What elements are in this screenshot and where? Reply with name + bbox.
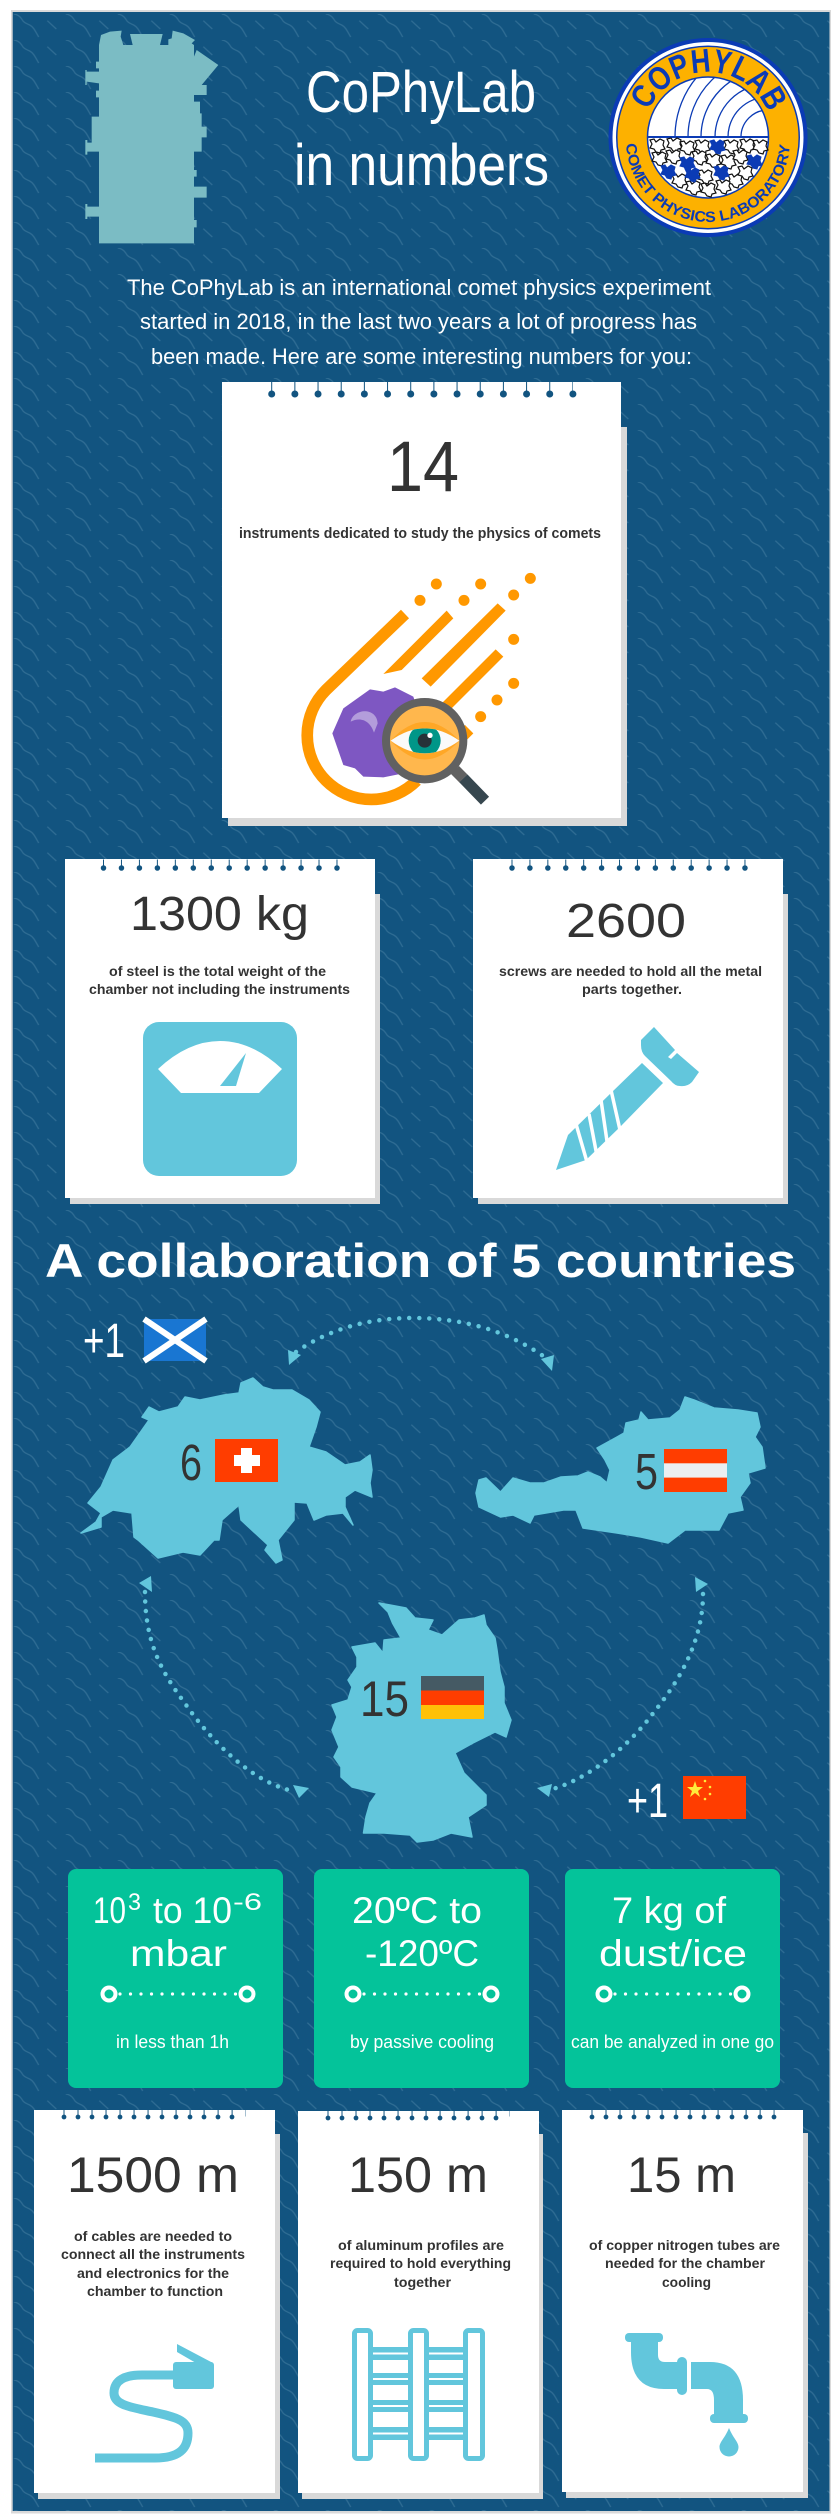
connector	[102, 1988, 254, 2000]
label: plus one China	[627, 1775, 746, 1828]
title: in numbers	[294, 133, 549, 198]
caption: steel: of steel is the total weight of the	[109, 963, 326, 979]
value: temperature range	[352, 1890, 482, 1974]
caption: copper: needed for the chamber	[605, 2255, 766, 2271]
icon: cable	[95, 2344, 214, 2458]
caption: aluminum: together	[394, 2274, 452, 2290]
caption: cooling: by passive cooling	[350, 2032, 494, 2052]
caption: screws: screws are needed to hold all the metal	[499, 963, 762, 979]
caption: aluminum: of aluminum profiles are	[338, 2237, 504, 2253]
label: plus one China: +1	[627, 1775, 668, 1828]
caption: cables: of cables are needed to	[74, 2228, 232, 2244]
number: 15 m: 15 m	[627, 2147, 736, 2203]
map: Austria	[476, 1397, 765, 1543]
panel: 150 m aluminum	[298, 2111, 543, 2499]
map: Switzerland	[81, 1378, 372, 1563]
caption: time: in less than 1h	[116, 2032, 229, 2052]
connector	[598, 1988, 748, 2000]
icon: aluminium frame	[354, 2330, 482, 2458]
icon: comet under magnifying glass	[307, 573, 536, 801]
map: Germany	[332, 1603, 511, 1842]
logo: CoPhyLab badge	[608, 38, 808, 237]
value: sample mass: dust/ice	[599, 1933, 747, 1974]
value: pressure range: to 10	[153, 1890, 232, 1931]
logo: CoPhyLab badge: COPHYLAB	[632, 48, 786, 109]
label: Switzerland count: 6	[180, 1434, 202, 1491]
intro text	[127, 275, 711, 369]
caption: analysis: can be analyzed in one go	[571, 2032, 774, 2052]
flag: China	[683, 1776, 746, 1819]
panel: 15 m copper	[562, 2110, 808, 2498]
caption: aluminum	[330, 2237, 511, 2290]
number: 1500 m: 1500 m	[67, 2147, 239, 2203]
caption: steel	[89, 963, 350, 997]
value: pressure range: 10	[93, 1890, 126, 1931]
panel: 1500 m cables	[34, 2110, 280, 2499]
caption: steel: chamber not including the instruments	[89, 981, 350, 997]
caption: cables: connect all the instruments	[61, 2246, 245, 2262]
label: Austria count	[635, 1443, 727, 1500]
panel: 1300 kg	[65, 859, 380, 1204]
icon: dripping pipe	[625, 2333, 748, 2456]
arrow: Austria to Germany	[537, 1577, 708, 1797]
number: 2600: 2600	[566, 895, 686, 948]
icon: chamber silhouette	[85, 31, 218, 243]
value: sample mass: 7 kg of	[612, 1890, 727, 1931]
caption: aluminum: required to hold everything	[330, 2255, 511, 2271]
flag: Switzerland	[215, 1439, 278, 1482]
label: Germany count: 15	[360, 1671, 409, 1727]
logo: CoPhyLab badge: COMET PHYSICS LABORATORY	[626, 144, 790, 222]
caption: cables: and electronics for the	[77, 2265, 229, 2281]
panel: 2600 screws	[473, 859, 788, 1204]
card: temperature	[314, 1869, 529, 2088]
arrow: Switzerland to Austria	[288, 1318, 554, 1371]
icon: screw	[556, 1027, 699, 1170]
intro text: The CoPhyLab is an international comet physics experiment	[127, 275, 711, 300]
intro text: started in 2018, in the last two years a lot of progress has	[140, 309, 697, 334]
arrow: Switzerland to Germany	[139, 1576, 309, 1798]
caption: copper: cooling	[662, 2274, 711, 2290]
panel: 14 instruments	[222, 382, 627, 826]
flag: Scotland	[144, 1319, 206, 1361]
flag: Austria	[664, 1449, 727, 1492]
caption: screws	[499, 963, 762, 997]
flag: Germany	[421, 1676, 484, 1719]
value: sample mass	[599, 1890, 747, 1974]
intro text: been made. Here are some interesting numbers for you:	[151, 344, 692, 369]
number: 14: 14	[387, 428, 459, 507]
number: 1300 kg: 1300 kg	[130, 888, 309, 941]
label: plus one Scotland: +1	[83, 1315, 125, 1368]
icon: weighing scale	[143, 1022, 297, 1176]
value: pressure range: mbar	[130, 1933, 227, 1974]
caption: screws: parts together.	[582, 981, 682, 997]
label: plus one Scotland	[83, 1315, 206, 1368]
value: pressure range: -6	[233, 1889, 262, 1916]
value: pressure range	[93, 1889, 262, 1974]
value: temperature range: 20ºC to	[352, 1890, 482, 1931]
label: Austria count: 5	[635, 1443, 658, 1500]
card: sample mass	[565, 1869, 780, 2088]
caption: copper	[589, 2237, 780, 2290]
value: pressure range: 3	[128, 1889, 141, 1916]
card: pressure	[68, 1869, 283, 2088]
caption: cables: chamber to function	[87, 2283, 223, 2299]
heading: collaboration: A collaboration of 5 countries	[45, 1234, 796, 1287]
caption: instruments: instruments dedicated to study the physics of comets	[239, 526, 601, 542]
label: Switzerland count	[180, 1434, 278, 1491]
number: 150 m: 150 m	[348, 2147, 488, 2203]
label: Germany count	[360, 1671, 484, 1727]
caption: copper: of copper nitrogen tubes are	[589, 2237, 780, 2253]
title	[294, 60, 549, 198]
caption: cables	[61, 2228, 245, 2299]
title: CoPhyLab	[306, 60, 536, 125]
connector	[346, 1988, 498, 2000]
value: temperature range: -120ºC	[365, 1933, 479, 1974]
